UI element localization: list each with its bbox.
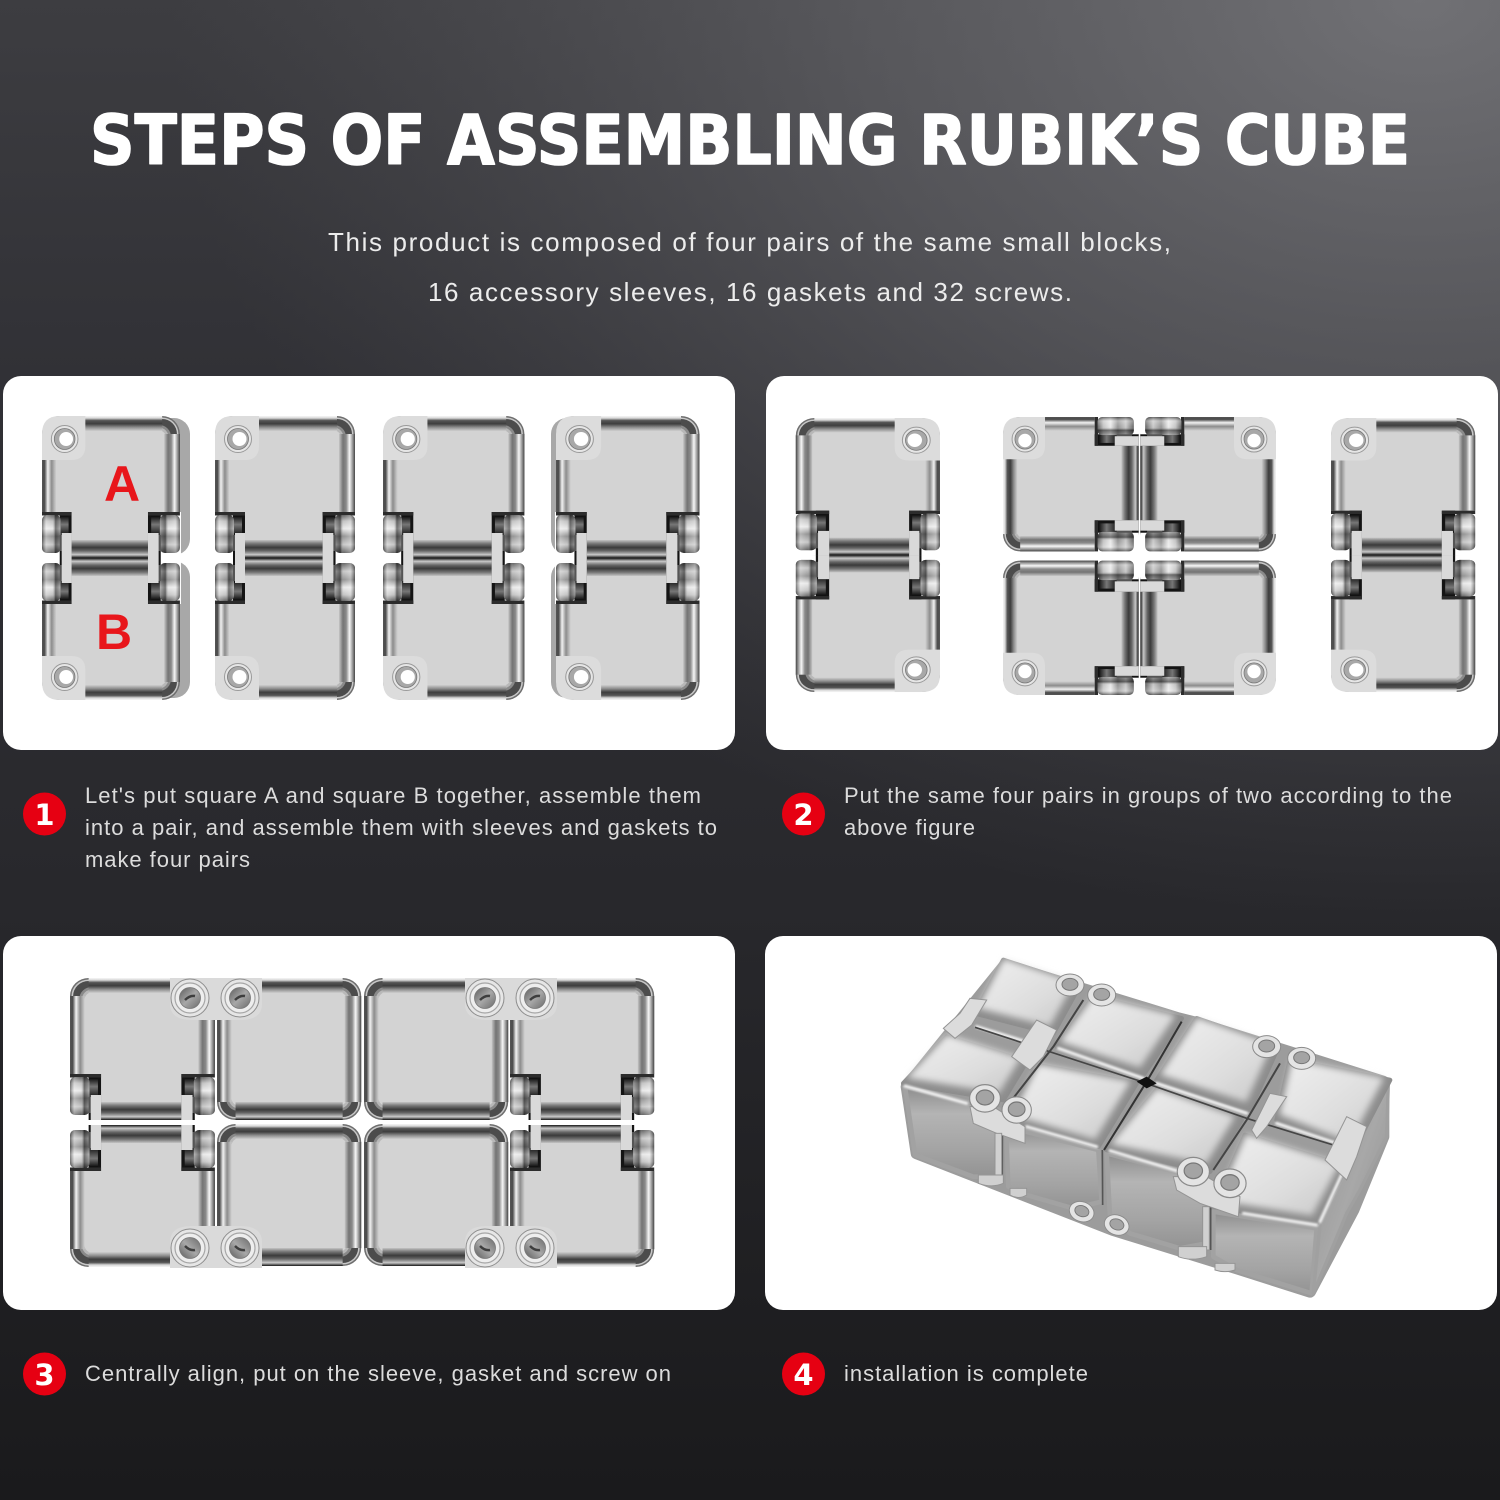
step 3 text: Centrally align, put on the sleeve, gasket and screw on — [85, 1361, 671, 1386]
assembled flat blocks — [69, 978, 655, 1267]
step 1 text — [85, 783, 717, 872]
block pair with labels A and B: B — [96, 604, 132, 660]
step 2 badge — [782, 792, 825, 836]
intro text: This product is composed of four pairs of the same small blocks, — [328, 227, 1171, 257]
step 1 badge — [23, 792, 66, 836]
intro text — [328, 227, 1171, 307]
intro text: 16 accessory sleeves, 16 gaskets and 32 screws. — [428, 277, 1072, 307]
block pair 4 — [551, 416, 701, 700]
assembled cube — [903, 959, 1390, 1293]
step 3 badge — [23, 1352, 66, 1396]
block pair 3 — [382, 416, 525, 700]
panel: step 2 figure — [766, 376, 1498, 750]
four blocks in the middle — [1003, 416, 1276, 696]
panel: step 4 figure — [765, 936, 1497, 1310]
step 1 text: Let's put square A and square B together, assemble them — [85, 783, 701, 808]
step 4 text: installation is complete — [844, 1361, 1088, 1386]
step 4 badge — [782, 1352, 825, 1396]
step 2 text: above figure — [844, 815, 975, 840]
step 1 badge: 1 — [34, 798, 55, 832]
right block pair — [1330, 418, 1476, 692]
panel: step 1 figure — [3, 376, 735, 750]
left block pair — [795, 418, 941, 692]
step 4 badge: 4 — [793, 1358, 814, 1392]
panel: step 3 figure — [3, 936, 735, 1310]
block pair with labels A and B — [41, 416, 190, 700]
step 1 text: make four pairs — [85, 847, 250, 872]
sleeves with screws — [170, 978, 557, 1268]
step 1 text: into a pair, and assemble them with sleeves and gaskets to — [85, 815, 717, 840]
block pair 2 — [214, 416, 356, 700]
step 2 badge: 2 — [793, 798, 814, 832]
step 3 badge: 3 — [34, 1358, 55, 1392]
block pair with labels A and B: A — [104, 456, 140, 512]
step 2 text: Put the same four pairs in groups of two according to the — [844, 783, 1452, 808]
step 2 text — [844, 783, 1452, 840]
